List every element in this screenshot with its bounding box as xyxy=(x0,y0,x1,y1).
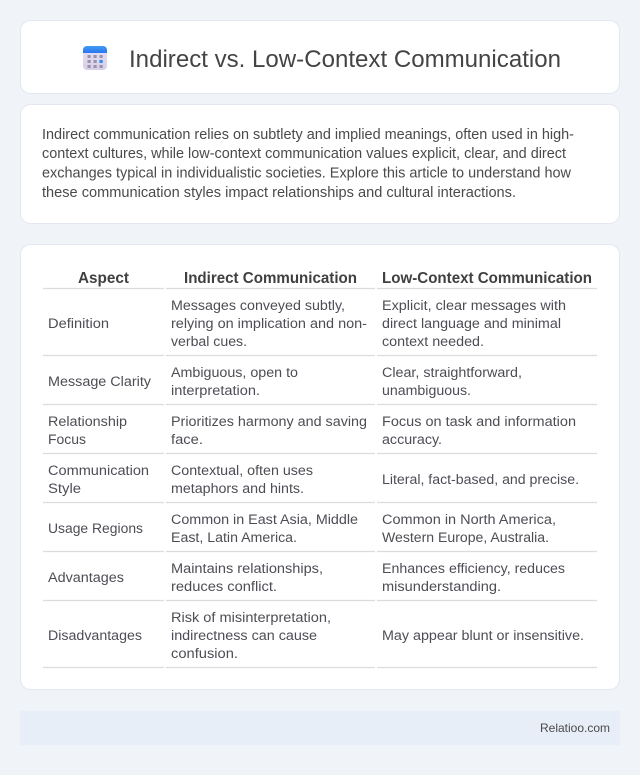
row: definition: Definition xyxy=(48,316,109,332)
row: message clarity xyxy=(48,365,522,399)
panel: title card xyxy=(20,20,620,94)
row: disadvantages: Disadvantages xyxy=(48,628,142,644)
row: communication style: Style xyxy=(48,481,81,497)
row: disadvantages xyxy=(48,610,584,662)
row: relationship focus xyxy=(48,414,576,448)
row: definition: direct language and minimal xyxy=(382,316,561,332)
row: disadvantages: confusion. xyxy=(171,646,238,662)
table header row: Aspect xyxy=(78,270,130,287)
row: message clarity: Ambiguous, open to xyxy=(171,365,298,381)
row: relationship focus: Relationship xyxy=(48,414,127,430)
row: communication style: Communication xyxy=(48,463,149,479)
text block: introduction paragraph: context cultures, while low-context communication values explicit, clear, and direct xyxy=(42,146,566,162)
footer bar xyxy=(20,711,620,745)
row: usage regions: Common in North America, xyxy=(382,512,556,528)
text block: introduction paragraph xyxy=(42,127,574,201)
icon: calendar xyxy=(83,46,107,70)
row: communication style xyxy=(48,463,579,497)
row: message clarity: Message Clarity xyxy=(48,374,152,390)
row: communication style: Contextual, often uses xyxy=(171,463,313,479)
row: relationship focus: accuracy. xyxy=(382,432,442,448)
row: definition: Explicit, clear messages with xyxy=(382,298,566,314)
row: communication style: Literal, fact-based, and precise. xyxy=(382,472,579,488)
text block: introduction paragraph: exchanges typical in individualistic societies. Explore this article to understand how xyxy=(42,166,571,182)
row: definition: Messages conveyed subtly, xyxy=(171,298,345,314)
row: definition: context needed. xyxy=(382,334,484,350)
row: advantages: misunderstanding. xyxy=(382,579,501,595)
panel: introduction xyxy=(20,104,620,224)
row: usage regions: Usage Regions xyxy=(48,521,143,537)
row: relationship focus: Focus on task and information xyxy=(382,414,576,430)
text block: introduction paragraph: Indirect communication relies on subtlety and implied meanings, often used in high- xyxy=(42,127,574,143)
row: relationship focus: Focus xyxy=(48,432,86,448)
footer credit: Relatioo.com xyxy=(540,721,610,735)
row: usage regions xyxy=(48,512,556,546)
row: disadvantages: indirectness can cause xyxy=(171,628,317,644)
row: advantages: Enhances efficiency, reduces xyxy=(382,561,565,577)
table header row: Low-Context Communication xyxy=(382,270,592,287)
row: advantages: Maintains relationships, xyxy=(171,561,323,577)
panel: comparison table xyxy=(20,244,620,690)
row: definition: verbal cues. xyxy=(171,334,247,350)
row: message clarity: Clear, straightforward, xyxy=(382,365,522,381)
row: definition: relying on implication and non- xyxy=(171,316,367,332)
row: communication style: metaphors and hints. xyxy=(171,481,304,497)
title: Indirect vs. Low-Context Communication xyxy=(129,46,561,73)
row: usage regions: Western Europe, Australia. xyxy=(382,530,549,546)
row: usage regions: East, Latin America. xyxy=(171,530,297,546)
row: usage regions: Common in East Asia, Middle xyxy=(171,512,358,528)
row: relationship focus: face. xyxy=(171,432,203,448)
row: message clarity: unambiguous. xyxy=(382,383,471,399)
row: advantages: reduces conflict. xyxy=(171,579,277,595)
row: advantages: Advantages xyxy=(48,570,124,586)
row: definition xyxy=(48,298,566,350)
table header row: Indirect Communication xyxy=(184,270,357,287)
row: message clarity: interpretation. xyxy=(171,383,260,399)
row: relationship focus: Prioritizes harmony and saving xyxy=(171,414,367,430)
text block: introduction paragraph: these communication styles impact relationships and cultural interactions. xyxy=(42,185,516,201)
table header row xyxy=(78,270,592,287)
row: advantages xyxy=(48,561,565,595)
row: disadvantages: Risk of misinterpretation, xyxy=(171,610,331,626)
row: disadvantages: May appear blunt or insensitive. xyxy=(382,628,584,644)
